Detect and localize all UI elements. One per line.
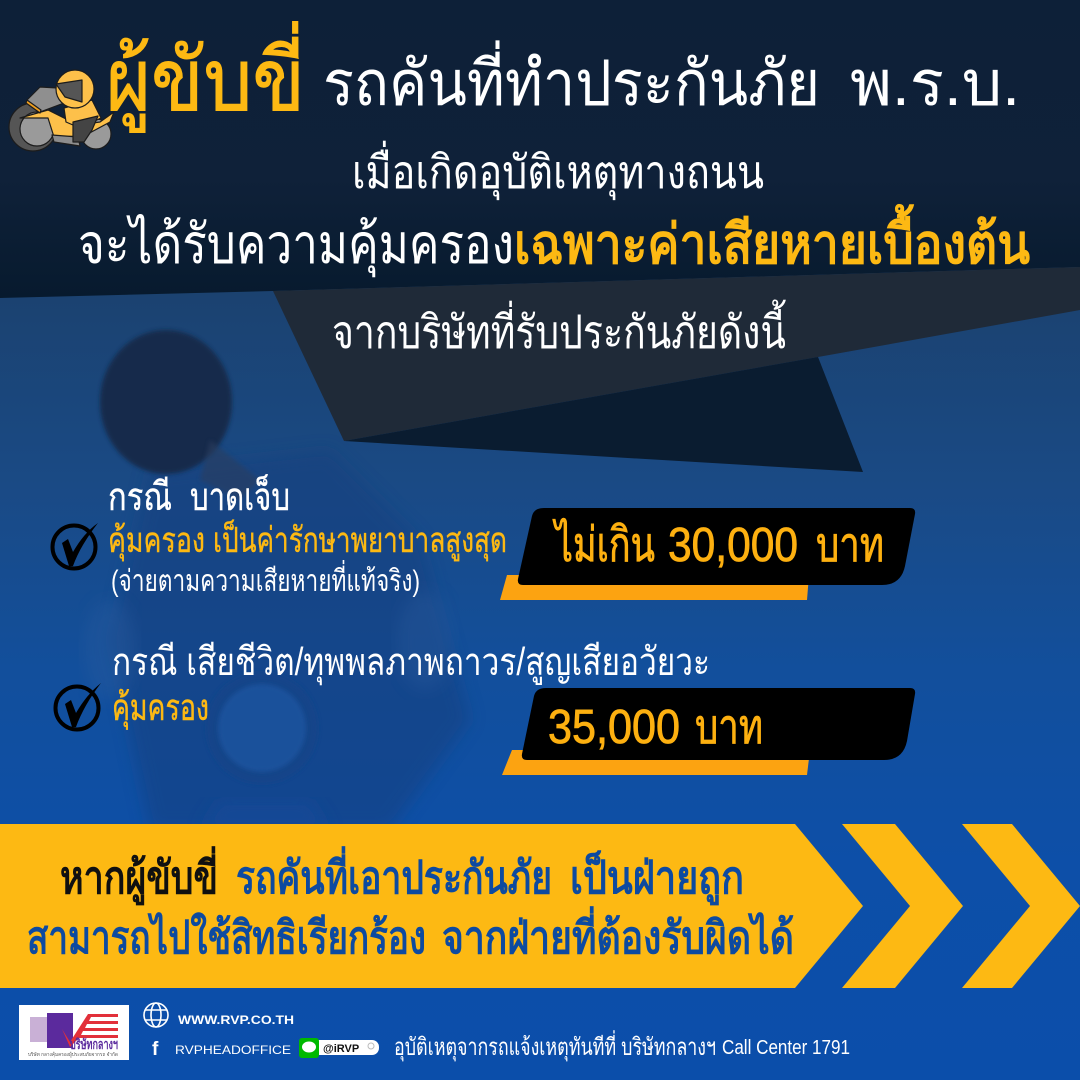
dark header band (0, 0, 1080, 298)
title line 2: เมื่อเกิดอุบัติเหตุทางถนน (352, 140, 764, 201)
title line 1: ผู้ขับขี่ (106, 21, 305, 133)
title line 3 (78, 204, 1030, 278)
icon: globe (144, 1003, 168, 1027)
amount box 2: 35,000 (548, 701, 680, 754)
amount box 1: ไม่เกิน (552, 517, 655, 572)
bottom arrow banner (0, 824, 1080, 988)
bottom arrow banner: เป็นฝ่ายถูก (570, 850, 744, 906)
title line 1: พ.ร.บ. (850, 49, 1020, 119)
footer logo: บริษัท กลางคุ้มครองผู้ประสบภัยจากรถ จำกัด (28, 1051, 118, 1058)
icon: motorcycle rider (9, 70, 114, 151)
icon: facebook: f (152, 1039, 159, 1060)
title line 4: จากบริษัทที่รับประกันภัยดังนี้ (332, 299, 786, 358)
amount box 1: 30,000 (668, 519, 798, 572)
background photo: rider silhouette (84, 330, 470, 830)
grey angular shape (273, 267, 1080, 441)
footer logo (19, 1005, 129, 1060)
case 1 text: เป็นค่ารักษาพยาบาลสูงสุด (213, 519, 507, 561)
case 2 text: กรณี เสียชีวิต/ทุพพลภาพถาวร/สูญเสียอวัยวะ (112, 641, 710, 686)
website: WWW.RVP.CO.TH (178, 1013, 294, 1027)
title line 1 (106, 21, 1020, 133)
line badge (299, 1038, 379, 1058)
case 1 text: คุ้มครอง (108, 521, 205, 561)
bottom arrow banner: หากผู้ขับขี่ (60, 846, 218, 906)
icon: check 2 (56, 683, 101, 730)
line badge: @iRVP (323, 1043, 359, 1055)
title line 1: รถคันที่ทำประกันภัย (323, 40, 820, 119)
case 1 text: กรณี (108, 476, 172, 519)
case 1 text (108, 473, 507, 598)
case 2 text (112, 641, 710, 730)
title line 3: จะได้รับความคุ้มครอง (78, 213, 514, 278)
amount box 1 (500, 508, 915, 600)
facebook handle: RVPHEADOFFICE (175, 1043, 291, 1057)
bottom arrow banner: รถคันที่เอาประกันภัย (236, 846, 552, 903)
footer logo: บริษัทกลางฯ (70, 1036, 118, 1052)
amount box 2: บาท (695, 701, 763, 754)
case 1 text: (จ่ายตามความเสียหายที่แท้จริง) (111, 560, 420, 598)
amount box 1: บาท (816, 519, 884, 572)
bottom arrow banner: สามารถไปใช้สิทธิเรียกร้อง (27, 911, 426, 963)
call center text: อุบัติเหตุจากรถแจ้งเหตุทันทีที่ บริษัทกลางฯ (394, 1030, 716, 1062)
icon: check 1 (52, 523, 98, 568)
case 2 text: คุ้มครอง (112, 687, 209, 730)
bottom arrow banner: จากฝ่ายที่ต้องรับผิดได้ (442, 906, 794, 963)
dark angular shape (344, 357, 863, 472)
call center text: Call Center 1791 (722, 1037, 850, 1059)
amount box 2 (502, 688, 915, 775)
case 1 text: บาดเจ็บ (190, 473, 290, 519)
